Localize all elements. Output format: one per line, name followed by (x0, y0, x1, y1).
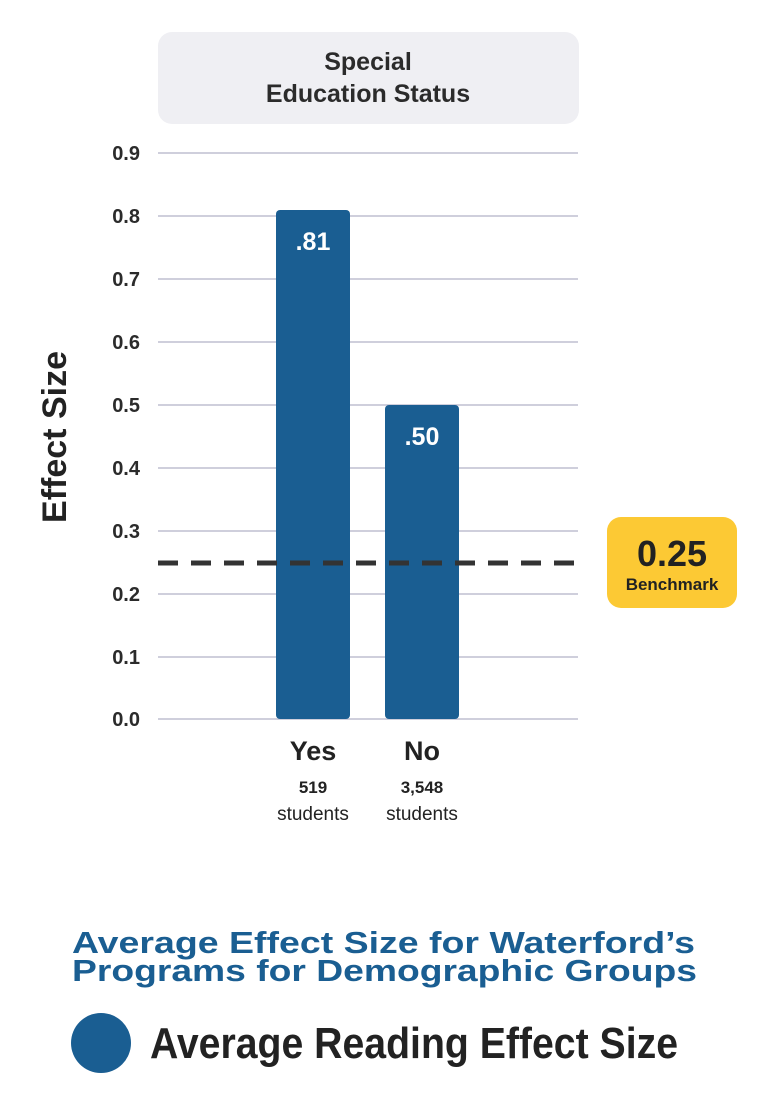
y axis tick labels: 0.9 (112, 143, 140, 165)
category label: Yes: Yes (290, 736, 336, 766)
bar: Yes .81: .81 (296, 228, 330, 256)
benchmark callout (607, 517, 737, 608)
category label: Yes: students (277, 804, 349, 825)
y axis tick labels: 0.3 (112, 521, 140, 543)
footer title: Programs for Demographic Groups (72, 953, 697, 988)
benchmark callout: Benchmark (626, 575, 719, 594)
chart header box: Special (324, 48, 412, 76)
category label: No: No (404, 736, 440, 766)
category label: No (386, 736, 458, 825)
legend: Average Reading Effect Size (150, 1019, 678, 1068)
chart header box: Education Status (266, 80, 470, 108)
category label: No: 3,548 (401, 778, 443, 797)
y axis tick labels: 0.0 (112, 709, 140, 731)
benchmark dashed line (158, 560, 578, 566)
category label: No: students (386, 804, 458, 825)
y axis title: Effect Size (36, 351, 74, 523)
y axis tick labels: 0.1 (112, 647, 140, 669)
benchmark callout: 0.25 (637, 533, 707, 574)
y axis tick labels: 0.5 (112, 395, 140, 417)
footer title (72, 925, 697, 988)
footer title: Average Effect Size for Waterford’s (72, 925, 695, 960)
bar: Yes .81 (276, 210, 350, 719)
y axis tick labels (112, 143, 141, 731)
y axis tick labels: 0.8 (112, 206, 140, 228)
bar: No .50: .50 (405, 423, 439, 451)
y axis tick labels: 0.7 (112, 269, 140, 291)
y axis tick labels: 0.2 (112, 584, 140, 606)
y axis tick labels: 0.6 (112, 332, 140, 354)
y axis tick labels: 0.4 (112, 458, 141, 480)
chart header box (158, 32, 579, 124)
legend (71, 1013, 678, 1073)
category label: Yes: 519 (299, 778, 327, 797)
bar: No .50 (385, 405, 459, 719)
category label: Yes (277, 736, 349, 825)
